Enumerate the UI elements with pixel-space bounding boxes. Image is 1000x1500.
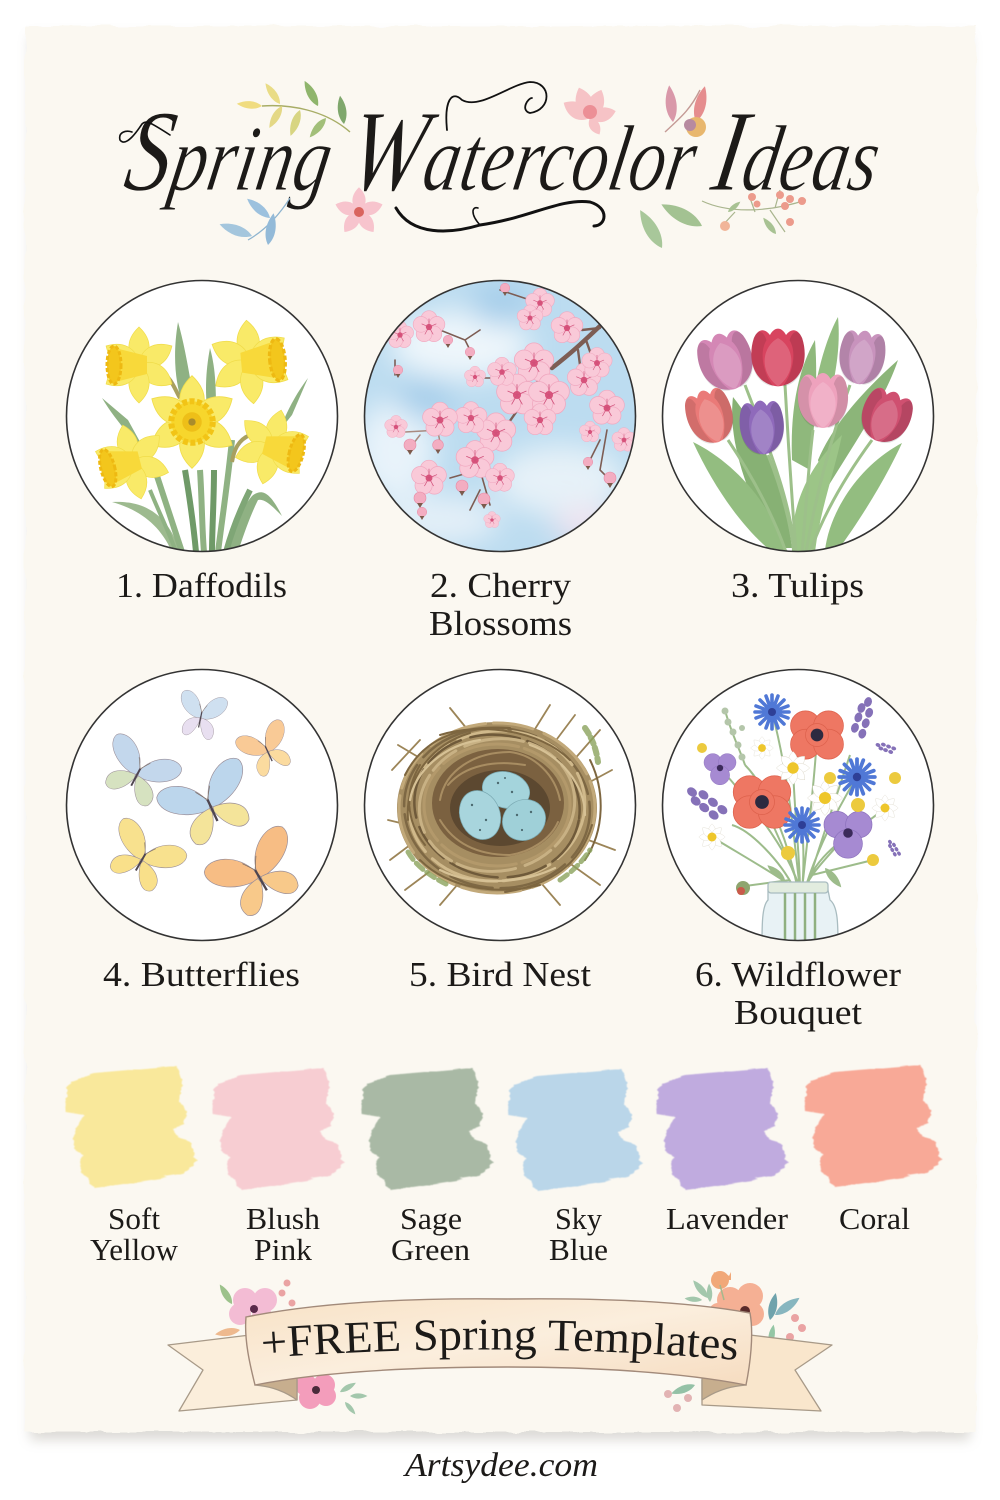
bouquet illustration (663, 670, 933, 945)
panel: bird nest (364, 670, 636, 994)
swatch labels: Green (391, 1232, 471, 1267)
label: 3. Tulips (731, 566, 864, 605)
circle outline (66, 280, 338, 552)
circle outline (66, 670, 338, 940)
mason jar (762, 882, 838, 945)
ribbon tails (168, 1335, 832, 1411)
swatch labels: Lavender (666, 1201, 789, 1236)
circle outline (364, 280, 636, 552)
swatch labels: Blush (246, 1201, 321, 1236)
label: 5. Bird Nest (409, 955, 591, 994)
label (429, 566, 572, 643)
swatch labels: Pink (254, 1232, 313, 1267)
swatch labels: Sage (400, 1201, 462, 1236)
panel: colour swatches (66, 1065, 941, 1267)
icon: pink flower bottom (333, 187, 385, 236)
circle outline (662, 670, 934, 940)
label: Bouquet (734, 993, 862, 1032)
label: 2. Cherry (430, 566, 572, 605)
swatch labels (90, 1201, 910, 1267)
panel: tulips (662, 280, 934, 605)
sprig: green leaves (635, 198, 705, 251)
swatch: blush pink (213, 1068, 343, 1190)
panel: butterflies (66, 670, 338, 994)
swatch labels: Blue (549, 1232, 608, 1267)
sprig: blue leaves (218, 195, 290, 246)
circle outline (364, 670, 636, 940)
sprig: coral berries (702, 190, 806, 236)
ribbon band (246, 1299, 752, 1385)
panel: wildflower bouquet (662, 670, 934, 1032)
swatch: lavender (657, 1068, 787, 1190)
swatch labels: Sky (555, 1201, 602, 1236)
daffodil illustration (67, 281, 337, 552)
swatch labels: Coral (839, 1201, 910, 1236)
bird nest illustration (365, 670, 635, 940)
title swashes (120, 82, 604, 231)
banner right flowers (664, 1271, 806, 1412)
banner left flowers (214, 1280, 367, 1416)
label: 1. Daffodils (116, 566, 287, 605)
swatch labels: Yellow (90, 1232, 179, 1267)
title (117, 82, 892, 231)
cherry blossom illustration (355, 281, 636, 551)
swatch: sky blue (508, 1069, 642, 1191)
swatch: soft yellow (66, 1066, 196, 1188)
label: Blossoms (429, 604, 572, 643)
icon: pink flower top (560, 85, 618, 137)
sprig: yellow green leaves (236, 79, 350, 140)
tulip illustration (663, 281, 933, 552)
label (695, 955, 901, 1032)
circle outline (662, 280, 934, 552)
banner (167, 1271, 833, 1414)
swatch: coral (805, 1065, 941, 1187)
title text: Spring Watercolor Ideas (117, 88, 892, 216)
panel: daffodils (66, 280, 338, 605)
footer website: Artsydee.com (403, 1447, 598, 1484)
label: 6. Wildflower (695, 955, 901, 994)
butterfly illustration (67, 670, 337, 940)
label: 4. Butterflies (103, 955, 300, 994)
title floral decorations (218, 79, 806, 251)
swatch labels: Soft (108, 1201, 160, 1236)
swatch: sage green (362, 1068, 492, 1190)
icon: pink buds (664, 85, 710, 137)
banner text (262, 1349, 738, 1360)
panel: cherry blossoms (355, 280, 636, 643)
banner: +FREE Spring Templates (263, 1320, 736, 1363)
